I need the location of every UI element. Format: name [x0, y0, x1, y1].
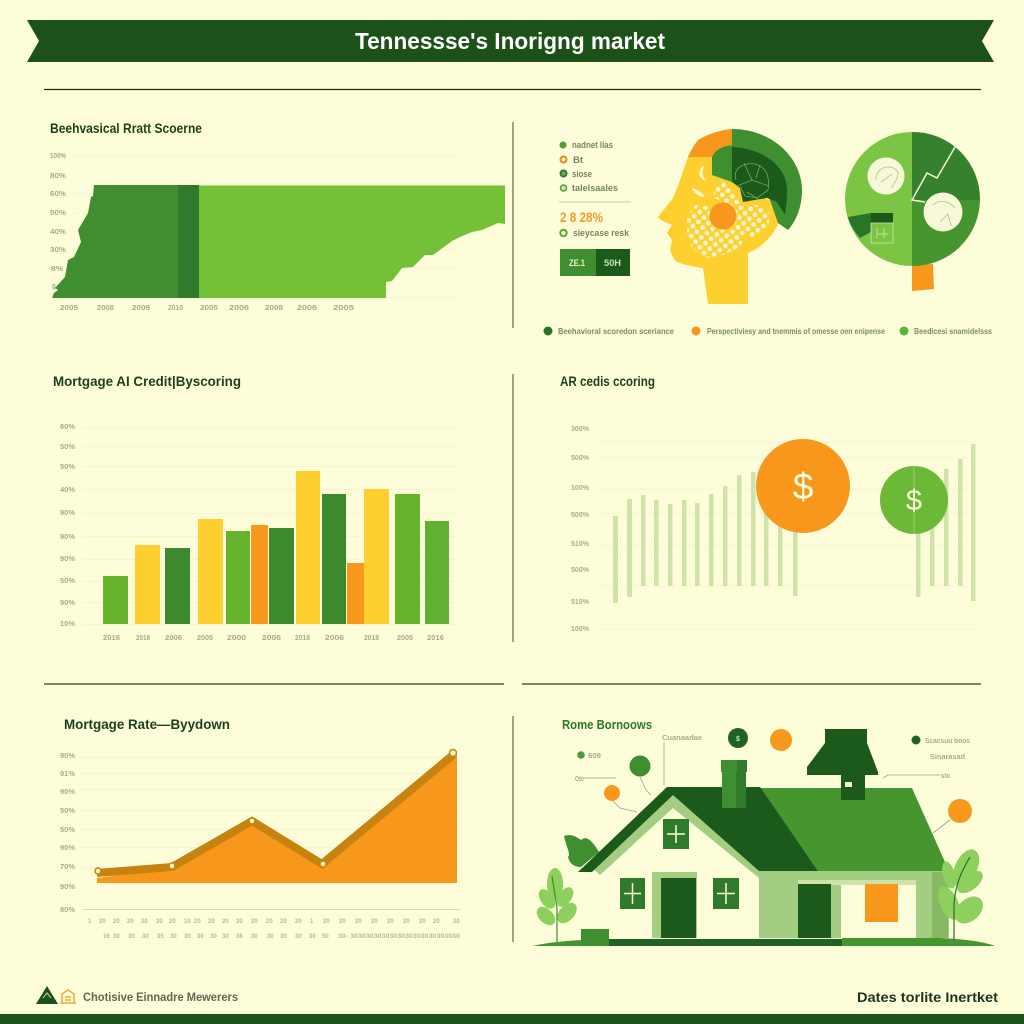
- legend list: Bt: [573, 155, 583, 165]
- icon: green dollar coin: $: [906, 485, 922, 517]
- y axis labels: [60, 424, 76, 628]
- bottom legend: Beehavioral scoredon sceriance: [558, 327, 675, 336]
- x axis labels: 20: [453, 919, 460, 925]
- x axis labels: 20: [266, 919, 273, 925]
- y axis labels: 100%: [50, 153, 67, 160]
- chimney: [721, 760, 747, 808]
- callout labels: 609: [588, 753, 601, 760]
- callout lines: [584, 742, 950, 833]
- x axis labels: 30: [280, 934, 287, 940]
- callout circles: [577, 728, 972, 823]
- x axis labels: 20: [419, 919, 426, 925]
- x axis labels: 2005: [60, 305, 78, 312]
- y axis labels: 90%: [60, 534, 76, 541]
- footer left text: Chotisive Einnadre Mewerers: [83, 990, 238, 1004]
- house: [578, 760, 949, 938]
- callout labels: [575, 735, 970, 783]
- y axis labels: 70%: [60, 864, 76, 871]
- area: [97, 753, 457, 883]
- panel: mortgage AI credit scoring bar chart: [53, 373, 458, 642]
- x axis labels: 20: [295, 919, 302, 925]
- y axis labels: 90%: [60, 556, 76, 563]
- x axis labels: 20: [323, 919, 330, 925]
- x axis labels: 20: [99, 919, 106, 925]
- footer left logo: [36, 986, 238, 1004]
- statistic: 2 8 28%: [560, 209, 603, 225]
- x axis labels: 20: [403, 919, 410, 925]
- x axis labels: 20: [169, 919, 176, 925]
- dotted pattern: [687, 180, 770, 258]
- x axis labels: 2016: [427, 635, 444, 642]
- callout labels: sto: [941, 773, 950, 780]
- y axis labels: [60, 753, 76, 914]
- x axis labels: 16: [103, 934, 110, 940]
- icon: roof vent silhouette: [807, 729, 878, 800]
- y axis labels: 500%: [571, 567, 590, 574]
- y axis labels: 50%: [60, 827, 76, 834]
- y axis labels: 30%: [50, 247, 67, 254]
- x axis labels: 2008: [97, 305, 114, 312]
- data boxes: 50H: [604, 258, 621, 268]
- x axis labels: 1: [88, 919, 92, 925]
- front door: [652, 872, 697, 938]
- y axis labels: 60%: [50, 191, 67, 198]
- x axis labels: [60, 305, 354, 312]
- x axis labels: 30: [295, 934, 302, 940]
- x axis labels: 20: [156, 919, 163, 925]
- y axis labels: 91%: [60, 771, 76, 778]
- x axis labels: 2018: [364, 635, 379, 642]
- x axis labels: 20: [387, 919, 394, 925]
- ground: [533, 929, 995, 946]
- x axis labels: 30: [309, 934, 316, 940]
- x axis labels: 30: [267, 934, 274, 940]
- x axis labels: 2008: [265, 305, 283, 312]
- x axis labels: 50: [322, 934, 329, 940]
- y axis labels: 8%: [51, 266, 64, 273]
- x axis labels: 30: [222, 934, 229, 940]
- y axis labels: 90%: [60, 510, 76, 517]
- y axis labels: $: [52, 284, 56, 291]
- callout labels: Sinarasad: [930, 754, 965, 761]
- x axis labels: 30: [113, 934, 120, 940]
- data points: [95, 750, 456, 874]
- y axis labels: 50%: [60, 808, 76, 815]
- x axis labels: 30: [170, 934, 177, 940]
- legend list: nadnet lias: [572, 140, 613, 150]
- x axis labels: 30: [210, 934, 217, 940]
- y axis labels: [571, 426, 590, 633]
- x axis labels: 20: [194, 919, 201, 925]
- panel: home borrowers house illustration: [533, 717, 995, 946]
- x axis labels: 20: [433, 919, 440, 925]
- panel: mortgage rate buydown area chart: [60, 716, 461, 940]
- icon: head with brain: [658, 129, 802, 304]
- bottom legend: Beedicesi snamidelsss: [914, 327, 992, 336]
- y axis labels: 60%: [60, 424, 76, 431]
- panel: AI credit scoring: [560, 373, 980, 633]
- y axis labels: 50%: [60, 578, 76, 585]
- x axis labels: 20: [371, 919, 378, 925]
- y axis labels: 90%: [60, 845, 76, 852]
- title banner: [27, 20, 994, 62]
- x axis labels: 2005: [397, 635, 413, 642]
- heading: Mortgage Rate—Byydown: [64, 716, 230, 732]
- Tennessee shape: [52, 185, 505, 298]
- y axis labels: 500%: [571, 455, 590, 462]
- y axis labels: 40%: [60, 487, 76, 494]
- pale bars: [613, 444, 976, 603]
- data boxes: ZE.1: [569, 258, 585, 268]
- bottom legend: Perspectiviesy and tnemmis of omesse oen enipense: [707, 327, 885, 336]
- x axis labels: 20: [339, 919, 346, 925]
- x axis labels: 2006: [297, 305, 317, 312]
- icon: right plant: [933, 845, 988, 940]
- icon: orange dollar coin: $: [793, 466, 813, 507]
- x axis labels: 20: [113, 919, 120, 925]
- x axis labels: 30- 3030303030303030303030303030: [338, 934, 461, 940]
- x axis labels: 20: [222, 919, 229, 925]
- y axis labels: 50%: [60, 444, 76, 451]
- bottom bar: [0, 1014, 1024, 1024]
- x axis labels: 30: [184, 934, 191, 940]
- y axis labels: 50%: [60, 464, 76, 471]
- callout circles: $: [736, 736, 740, 743]
- x axis labels: 2005: [197, 635, 213, 642]
- icon: orange dollar coin: [756, 439, 850, 533]
- x axis labels: 30: [197, 934, 204, 940]
- y axis labels: 10%: [60, 621, 76, 628]
- x axis labels: 2018: [136, 635, 150, 642]
- y axis labels: 90%: [60, 753, 76, 760]
- x axis labels: 30: [128, 934, 135, 940]
- x axis labels: 2005: [333, 305, 354, 312]
- heading: Rome Bornoows: [562, 717, 652, 732]
- y axis labels: 90%: [60, 600, 76, 607]
- legend list: talelsaales: [572, 183, 618, 193]
- y axis labels: [50, 153, 67, 291]
- x axis labels: 2006: [325, 635, 344, 642]
- x axis labels: 2006: [262, 635, 281, 642]
- x axis labels: [103, 635, 444, 642]
- x axis labels: 2016: [103, 635, 120, 642]
- y axis labels: 510%: [571, 599, 590, 606]
- x axis labels: 2006: [165, 635, 182, 642]
- heading: Beehvasical Rratt Scoerne: [50, 120, 202, 136]
- x axis labels: 20: [208, 919, 215, 925]
- icon: left plant: [533, 868, 581, 942]
- callout labels: Ote: [575, 776, 584, 783]
- data boxes: [560, 249, 630, 276]
- y axis labels: 510%: [571, 541, 590, 548]
- x axis labels: 20: [280, 919, 287, 925]
- y axis labels: 100%: [571, 626, 590, 633]
- callout labels: Cuanaadae: [662, 735, 702, 742]
- y axis labels: 300%: [571, 426, 590, 433]
- icon: green dollar coin: [880, 466, 948, 534]
- x axis labels: 2009: [132, 305, 150, 312]
- footer right text: Dates torlite Inertket: [857, 989, 998, 1005]
- x axis labels: 2018: [295, 635, 310, 642]
- heading: Mortgage AI Credit|Byscoring: [53, 373, 241, 389]
- x axis labels: 20: [236, 919, 243, 925]
- x axis labels: 10: [184, 919, 191, 925]
- x axis labels: 30: [251, 934, 258, 940]
- y axis labels: 80%: [60, 907, 76, 914]
- callout labels: Scacsuu boos: [925, 738, 970, 745]
- panel: behavioral scoring infographic: [544, 129, 992, 336]
- statistic label: sieycase resk: [573, 228, 630, 238]
- x axis labels: 2005: [200, 305, 218, 312]
- x axis labels: 1: [310, 919, 314, 925]
- x axis labels: 35: [157, 934, 164, 940]
- x axis labels: 2000: [227, 635, 246, 642]
- x axis labels: [88, 919, 461, 940]
- legend list: siose: [572, 169, 592, 179]
- x axis labels: 30: [142, 934, 149, 940]
- title: Tennessse's Inorigng market: [355, 28, 665, 54]
- y axis labels: 500%: [571, 512, 590, 519]
- legend list: [560, 140, 618, 193]
- y axis labels: 90%: [60, 789, 76, 796]
- y axis labels: 80%: [50, 173, 67, 180]
- heading: AR cedis ccoring: [560, 373, 655, 389]
- windows: [620, 819, 739, 909]
- bars: [103, 471, 449, 624]
- x axis labels: 2010: [168, 305, 183, 312]
- icon: bush leaf: [564, 835, 599, 867]
- y axis labels: 100%: [571, 485, 590, 492]
- x axis labels: 20: [127, 919, 134, 925]
- x axis labels: 2006: [229, 305, 249, 312]
- bottom legend: [544, 326, 992, 336]
- x axis labels: 20: [141, 919, 148, 925]
- y axis labels: 40%: [50, 229, 67, 236]
- x axis labels: 20: [355, 919, 362, 925]
- icon: pie chart: [845, 132, 980, 291]
- x axis labels: 36: [236, 934, 243, 940]
- panel: behavioral risk score map chart: [50, 120, 505, 312]
- line band: [97, 755, 453, 873]
- y axis labels: 90%: [60, 884, 76, 891]
- y axis labels: 50%: [50, 210, 67, 217]
- x axis labels: 20: [251, 919, 258, 925]
